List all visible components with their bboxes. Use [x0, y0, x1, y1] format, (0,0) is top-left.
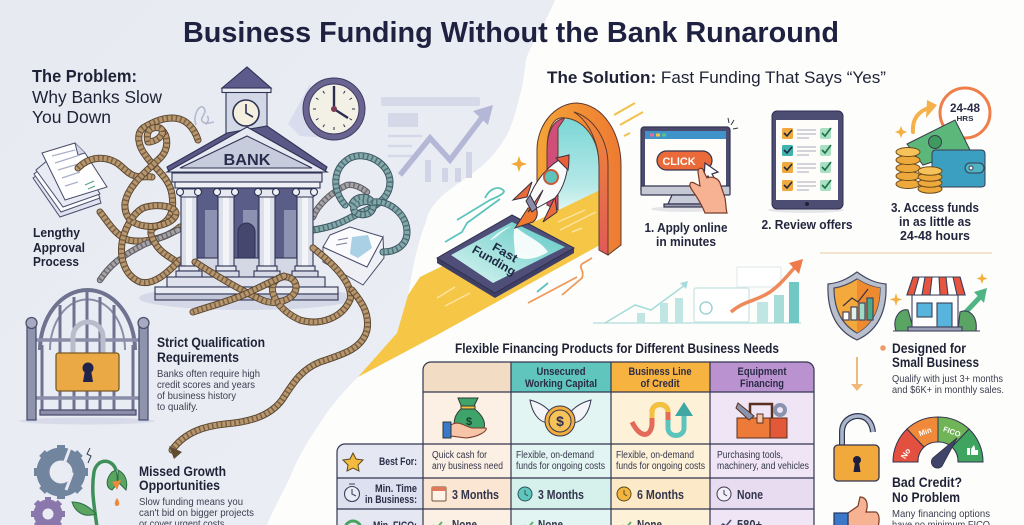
text: bad credit no problem: No Problem: [892, 489, 960, 505]
table body fills: [337, 392, 814, 525]
icon: wall clock: [288, 78, 365, 140]
text: strict qualification requirements: of business history: [157, 390, 237, 402]
text: missed growth opportunities: Opportunities: [139, 478, 220, 493]
wallet: [932, 150, 985, 187]
row: best for: any business need: [432, 461, 503, 472]
arrow: down: [851, 357, 863, 391]
padlock: [56, 322, 119, 391]
row: min time in business: 6 Months: [637, 488, 684, 502]
portal arch: [537, 103, 621, 255]
right documents and teal rope: [313, 156, 407, 285]
checklist rows: [782, 128, 831, 191]
yellow road: [358, 190, 600, 377]
text: designed for small business: [880, 340, 1004, 396]
heading: the problem: [32, 66, 162, 127]
text: missed growth opportunities: [139, 464, 254, 525]
text: bad credit no problem: Many financing options: [892, 508, 990, 520]
table header row: Unsecured: [536, 366, 586, 378]
text: step 1: [644, 220, 728, 249]
text: strict qualification requirements: to qualify.: [157, 401, 198, 413]
faded growth chart: [593, 259, 803, 323]
row: min time in business: [344, 483, 763, 506]
bank entablature: [172, 173, 322, 188]
row: best for: Quick cash for: [432, 450, 488, 461]
text: bad credit no problem: Bad Credit?: [892, 474, 962, 490]
icon: credit line arrow: [632, 402, 693, 436]
text: step 3: in as little as: [899, 214, 971, 229]
text: strict qualification requirements: Banks often require high: [157, 368, 260, 380]
row: min time in business: in Business:: [365, 494, 417, 506]
icon: stack of documents: [33, 143, 107, 217]
text: missed growth opportunities: Missed Growth: [139, 464, 226, 479]
title: Business Funding Without the Bank Runaround: [183, 17, 839, 49]
text: step 3: [891, 200, 979, 243]
icon: computer with click button: [641, 118, 738, 213]
icon: winged coin: [530, 400, 591, 436]
text: designed for small business: Qualify with just 3+ months: [892, 373, 1003, 385]
text: step 2: 2. Review offers: [762, 217, 852, 232]
portal inner glow: [556, 118, 600, 215]
heading: the problem: You Down: [32, 107, 111, 127]
icon: fico gauge: Min: [918, 425, 933, 438]
bank tower: [222, 67, 271, 140]
text: lengthy approval process: [33, 226, 85, 269]
text: strict qualification requirements: Strict Qualification: [157, 335, 265, 350]
text: step 3: 24-48 hours: [900, 228, 970, 243]
table header row: [423, 362, 814, 392]
illustration: portal, rocket and tablet: [358, 103, 643, 377]
banknote: [907, 120, 970, 165]
table header row: Business Line: [628, 366, 692, 378]
heading: the problem: Why Banks Slow: [32, 87, 162, 107]
text: lengthy approval process: Lengthy: [33, 226, 80, 240]
heading: the problem: The Problem:: [32, 66, 137, 86]
sparkle: [511, 156, 527, 172]
table header row: Equipment: [738, 366, 787, 378]
table: financing products: [337, 362, 814, 525]
row: best for: funds for ongoing costs: [516, 461, 605, 472]
bank interior: [197, 188, 300, 278]
tablet with fast funding: Funding: [470, 242, 518, 279]
row: best for: funds for ongoing costs: [616, 461, 705, 472]
icon: thumbs up: [834, 497, 879, 525]
text: step 1: in minutes: [656, 234, 716, 249]
tablet with fast funding: [437, 215, 574, 298]
text: strict qualification requirements: [157, 335, 265, 413]
table heading: Flexible Financing Products for Different Business Needs: [455, 341, 779, 356]
motion dashes: [614, 103, 643, 136]
text: lengthy approval process: Approval: [33, 241, 85, 255]
bank columns: [176, 188, 318, 277]
icon: winged coin: $: [556, 413, 564, 429]
orange arrow: [913, 108, 929, 132]
row: min time in business: None: [737, 488, 763, 502]
icon: locked gate: [19, 290, 155, 424]
row: best for: machinery, and vehicles: [717, 461, 809, 472]
icon: money, wallet and 24-48 hour clock: [895, 88, 990, 193]
table grid lines: [337, 362, 814, 525]
icon: fico gauge: FICO: [942, 424, 962, 439]
text: strict qualification requirements: credit scores and years: [157, 379, 255, 391]
bank roof: [167, 126, 327, 172]
text: lengthy approval process: Process: [33, 255, 79, 269]
text: missed growth opportunities: Slow funding means you: [139, 496, 243, 508]
faded chart behind bank: [381, 97, 493, 182]
text: designed for small business: and $6K+ in monthly sales.: [892, 384, 1004, 396]
scribble: [195, 107, 214, 125]
rope arrow: [169, 290, 368, 459]
row: min time in business: 3 Months: [538, 488, 584, 502]
text: step 3: 3. Access funds: [891, 200, 979, 215]
icon: fico gauge: [893, 417, 983, 468]
table header row: Working Capital: [525, 378, 597, 390]
text: designed for small business: Small Business: [892, 354, 979, 370]
icon: growth shield: [828, 272, 886, 340]
icon: money, wallet and 24-48 hour clock: 24-48: [950, 103, 981, 115]
speed lines: [445, 188, 504, 242]
row: best for: Flexible, on-demand: [516, 450, 594, 461]
table header row: of Credit: [640, 378, 680, 390]
text: step 1: 1. Apply online: [644, 220, 728, 235]
bank steps: [155, 277, 338, 300]
icon: open padlock: [834, 416, 879, 481]
icon: tablet checklist: [768, 111, 844, 213]
row: min time in business: Min. Time: [375, 483, 417, 495]
ropes over bank: [193, 248, 351, 322]
bank shadow: [139, 286, 355, 310]
text: missed growth opportunities: can't bid on bigger projects: [139, 507, 254, 519]
icon: money bag in hand: $: [466, 416, 472, 428]
illustration: bank building: [139, 67, 355, 310]
row: min fico: [345, 518, 762, 525]
text: designed for small business: Designed for: [892, 340, 966, 356]
road highlights: [437, 210, 596, 306]
icon: computer with click button: CLICK: [662, 156, 696, 168]
row: best for: [343, 450, 809, 472]
icon: money bag in hand: [443, 398, 486, 438]
row: best for: Best For:: [379, 456, 417, 468]
illustration: bank building: BANK: [224, 152, 271, 169]
tablet with fast funding: Fast: [490, 240, 520, 265]
table header row: Financing: [740, 378, 784, 390]
row: best for: Flexible, on-demand: [616, 450, 694, 461]
text: bad credit no problem: [892, 474, 990, 525]
clock: [940, 88, 990, 138]
icon: fico gauge: No: [899, 447, 913, 461]
background: problem side: [0, 0, 555, 525]
ropes behind bank: [78, 118, 198, 283]
text: strict qualification requirements: Requirements: [157, 350, 239, 365]
icon: storefront: [890, 273, 988, 331]
icon: broken gears and wilting plant: [31, 445, 127, 525]
icon: toolbox: [736, 403, 787, 438]
coin stacks: [896, 148, 942, 193]
row: best for: Purchasing tools,: [717, 450, 783, 461]
icon: money, wallet and 24-48 hour clock: HRS: [956, 114, 974, 123]
heading: the solution: The Solution: Fast Funding That Says “Yes”: [547, 68, 886, 87]
row: min time in business: 3 Months: [452, 488, 499, 502]
rocket: [513, 155, 569, 228]
